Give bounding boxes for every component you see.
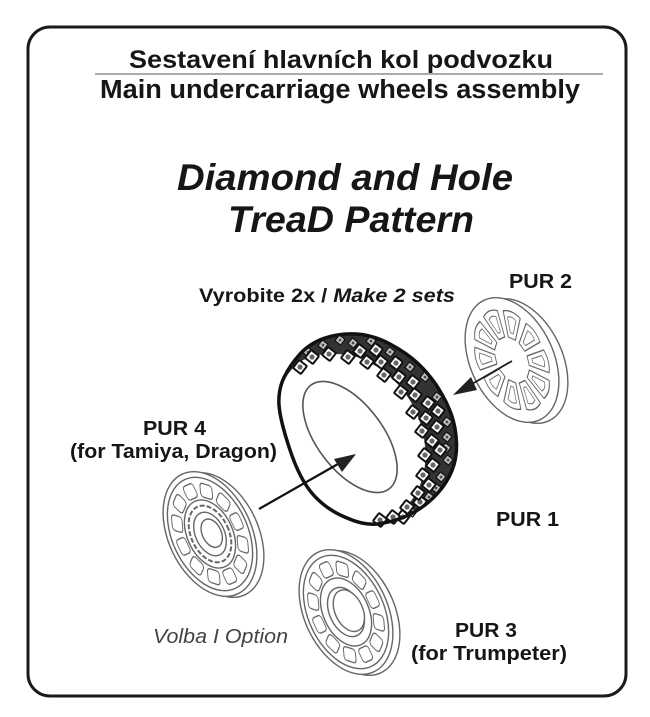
option note: Volba I Option xyxy=(153,626,288,648)
label PUR 4: (for Tamiya, Dragon) xyxy=(70,440,277,463)
label PUR 3: (for Trumpeter) xyxy=(411,642,567,665)
label PUR 2: PUR 2 xyxy=(509,270,572,293)
label PUR 3: PUR 3 xyxy=(455,619,517,642)
arrow to PUR 4 xyxy=(259,454,356,509)
label PUR 3 xyxy=(411,619,567,665)
title english: Main undercarriage wheels assembly xyxy=(100,76,581,104)
wheel PUR 2 xyxy=(446,283,587,438)
heading: Diamond and Hole xyxy=(177,157,513,198)
wheel PUR 4 xyxy=(144,457,283,612)
middle tread diamonds xyxy=(353,343,447,524)
outer tread diamonds xyxy=(303,335,453,517)
edge diamonds xyxy=(293,347,432,527)
sidewall xyxy=(276,354,425,525)
title czech: Sestavení hlavních kol podvozku xyxy=(129,46,553,74)
heading: TreaD Pattern xyxy=(228,199,474,240)
title rule xyxy=(95,73,603,75)
label PUR 4: PUR 4 xyxy=(143,417,207,440)
arrow from PUR 2 xyxy=(453,361,512,395)
tire outline xyxy=(279,334,457,524)
label PUR 1: PUR 1 xyxy=(496,508,559,531)
tire with diamond tread xyxy=(276,334,457,527)
make 2 sets note: Vyrobite 2x / Make 2 sets xyxy=(199,285,455,307)
heading xyxy=(177,157,513,240)
wheel PUR 3 xyxy=(280,535,419,690)
label PUR 4 xyxy=(70,417,277,463)
hub opening xyxy=(285,365,415,509)
tread base xyxy=(279,334,457,524)
